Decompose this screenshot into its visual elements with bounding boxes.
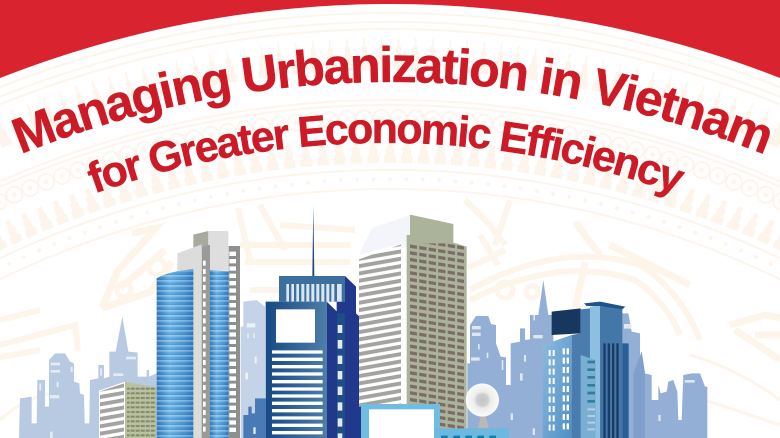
olive tall building	[359, 215, 467, 438]
satellite dish	[466, 383, 499, 428]
antenna	[312, 205, 314, 276]
title line 2: for Greater Economic Efficiency	[87, 114, 686, 198]
red banner	[0, 0, 780, 78]
small blue building	[243, 398, 266, 438]
title	[11, 46, 770, 198]
light blue low building	[361, 404, 509, 438]
skyline: right half	[359, 215, 707, 438]
background city silhouette left	[19, 317, 157, 438]
curved glass tower	[157, 231, 240, 438]
blue tower cluster	[543, 302, 629, 438]
white and olive building	[99, 382, 156, 438]
title line 1: Managing Urbanization in Vietnam	[11, 46, 770, 154]
background tower	[241, 300, 265, 438]
background city silhouette right	[467, 280, 707, 438]
skyline: left half	[19, 205, 365, 438]
navy tower	[266, 205, 365, 438]
